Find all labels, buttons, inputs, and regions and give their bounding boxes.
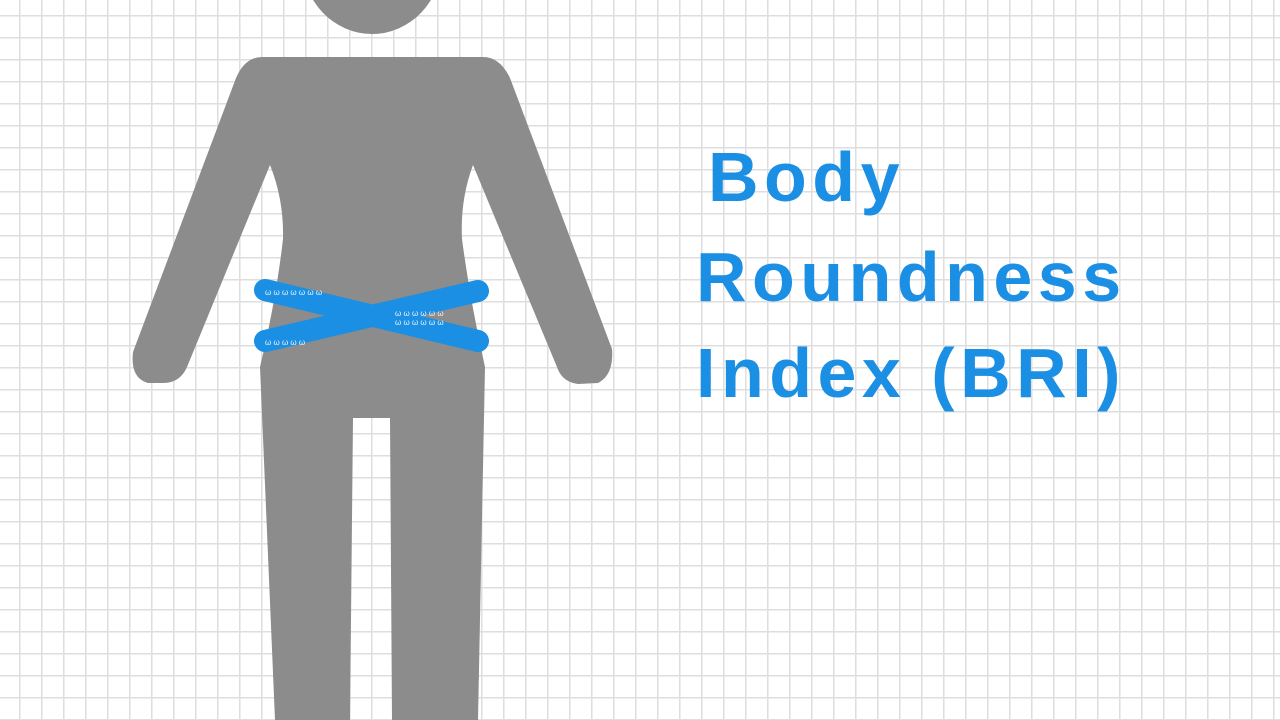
title: Roundness: [696, 238, 1127, 316]
body: [133, 57, 612, 720]
title: Body: [708, 138, 905, 216]
figure: person silhouette with measuring tape: ω ω ω ω ω: [265, 338, 305, 347]
figure: person silhouette with measuring tape: ω ω ω ω ω ω ω: [265, 288, 322, 297]
head: [302, 0, 442, 34]
figure: person silhouette with measuring tape: ω ω ω ω ω ω: [395, 309, 444, 318]
title: Index (BRI): [696, 334, 1126, 412]
measuring tape: [265, 290, 478, 341]
figure: person silhouette with measuring tape: ω ω ω ω ω ω: [395, 318, 444, 327]
